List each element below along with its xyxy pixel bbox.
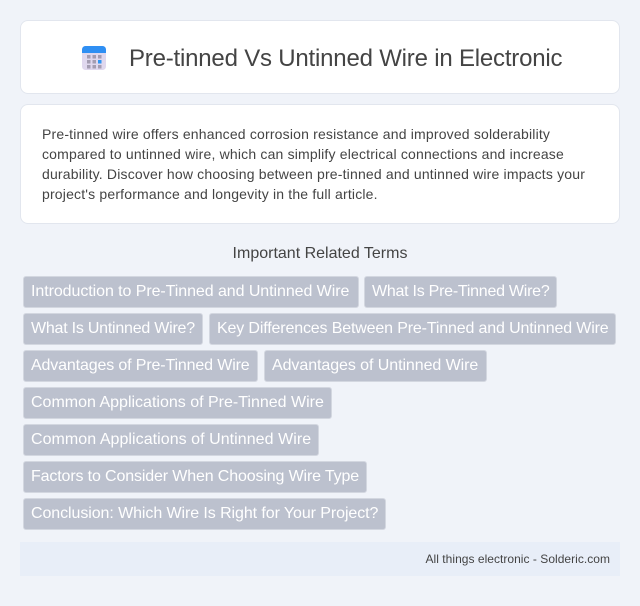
tag [23,424,319,456]
footer: All things electronic - Solderic.com [426,552,610,566]
header panel [20,20,620,94]
tag [23,461,367,493]
icon: calendar [82,46,106,70]
tag: Advantages of Untinned Wire [272,357,478,374]
section heading: Important Related Terms [233,245,407,262]
intro text: compared to untinned wire, which can simplify electrical connections and increase [42,146,564,162]
tag [364,276,557,308]
tag [23,387,332,419]
tag: Key Differences Between Pre-Tinned and Untinned Wire [217,320,609,337]
tag [209,313,616,345]
tag: What Is Untinned Wire? [31,320,195,337]
intro text: Pre-tinned wire offers enhanced corrosion resistance and improved solderability [42,126,550,142]
intro text: durability. Discover how choosing between pre-tinned and untinned wire impacts your [42,166,585,182]
tag [23,498,386,530]
tag [23,350,258,382]
title: Pre-tinned Vs Untinned Wire in Electronic [129,45,562,72]
tag [264,350,487,382]
footer [20,542,620,576]
tag: Common Applications of Pre-Tinned Wire [31,394,324,411]
tag: Conclusion: Which Wire Is Right for Your Project? [31,505,378,522]
tag: Advantages of Pre-Tinned Wire [31,357,250,374]
tag: What Is Pre-Tinned Wire? [372,283,549,300]
tag [23,313,203,345]
tag: Factors to Consider When Choosing Wire Type [31,468,359,485]
intro text: project's performance and longevity in the full article. [42,186,378,202]
intro text panel [20,104,620,224]
tag list [23,276,616,530]
intro text [42,126,585,202]
tag: Introduction to Pre-Tinned and Untinned Wire [31,283,349,300]
tag [23,276,359,308]
tag: Common Applications of Untinned Wire [31,431,311,448]
